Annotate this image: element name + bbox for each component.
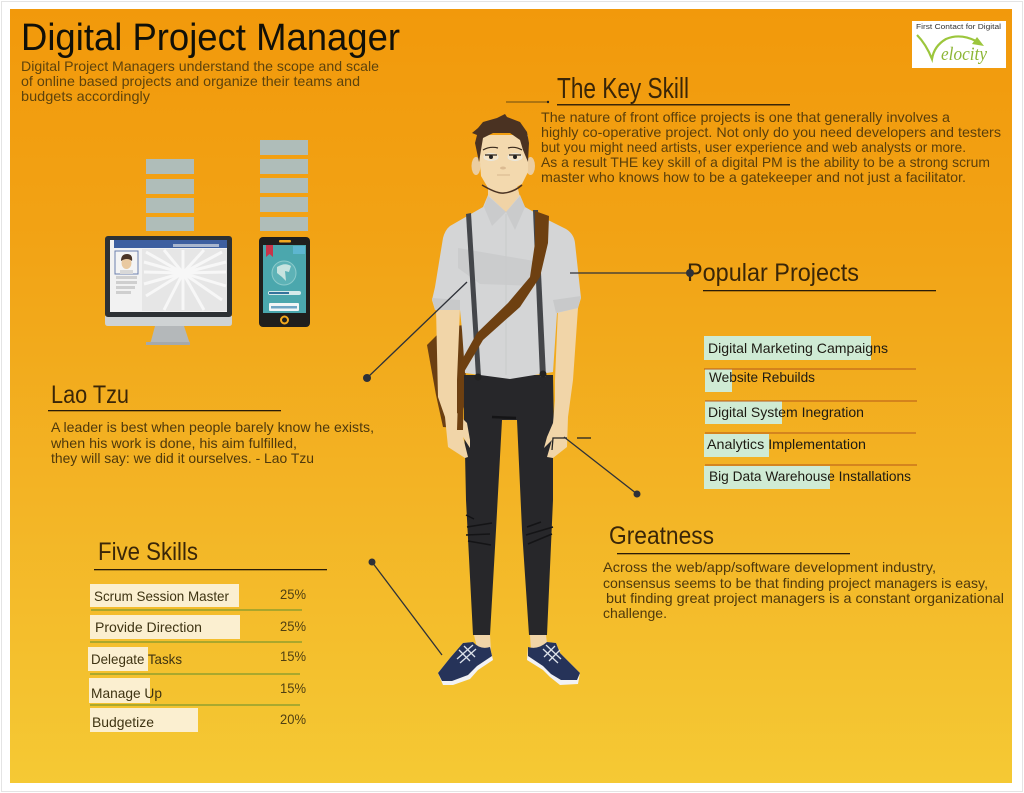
icon: desktop monitor <box>105 236 232 345</box>
figure: digital project manager character <box>427 114 581 685</box>
connector: Five Skills <box>368 558 442 655</box>
text: Greatness: challenge. <box>603 605 667 621</box>
chart: five skills list: Scrum Session Master <box>94 588 229 604</box>
heading: Greatness: Greatness <box>609 522 714 550</box>
icon: phone stacked bars <box>260 140 308 231</box>
suspenders <box>466 213 481 377</box>
text: key skill: The nature of front office projects is one that generally involves a <box>541 109 950 125</box>
arms <box>436 308 470 458</box>
list: popular projects: Analytics Implementation <box>707 436 866 452</box>
right shoe <box>527 642 580 685</box>
logo: Velocity: elocity <box>941 44 988 65</box>
ankles <box>474 635 491 652</box>
chart: five skills list: 25% <box>280 586 306 602</box>
icon: desktop stacked bars <box>146 159 194 231</box>
intro text: of online based projects and organize their teams and <box>21 73 360 89</box>
text: Lao Tzu quote: when his work is done, his aim fulfilled, <box>50 435 297 451</box>
list: popular projects: Big Data Warehouse Installations <box>709 468 911 484</box>
intro text <box>21 58 379 104</box>
chart: five skills list: Provide Direction <box>95 619 202 635</box>
text: key skill: but you might need artists, user experience and web analysts or more. <box>541 139 966 155</box>
chart: five skills list: Budgetize <box>92 714 154 730</box>
bag <box>427 325 466 428</box>
text: key skill: As a result THE key skill of a digital PM is the ability to be a strong scrum <box>541 154 990 170</box>
list: popular projects: Digital Marketing Campaigns <box>708 340 888 356</box>
connector: popular projects <box>570 269 694 277</box>
connector: key skill <box>506 101 549 103</box>
text: Lao Tzu quote: they will say: we did it ourselves. - Lao Tzu <box>51 450 314 466</box>
heading: The Key Skill: The Key Skill <box>557 73 689 105</box>
list: popular projects: Website Rebuilds <box>709 369 815 385</box>
left shoe <box>438 642 493 685</box>
list: popular projects: Digital System Inegration <box>708 404 864 420</box>
text: Lao Tzu quote <box>50 419 374 466</box>
head: face <box>478 135 528 193</box>
head: hair <box>472 114 529 162</box>
text: key skill <box>541 109 1001 185</box>
logo: Velocity <box>912 21 1006 68</box>
text: key skill: master who knows how to be a gatekeeper and not just a facilitator. <box>541 169 966 185</box>
chart: five skills list: Manage Up <box>91 685 162 701</box>
intro text: Digital Project Managers understand the scope and scale <box>21 58 379 74</box>
icon: smartphone <box>259 237 310 327</box>
shirt <box>432 195 581 379</box>
chart: five skills list: 15% <box>280 648 306 664</box>
heading: Five Skills: Five Skills <box>98 538 198 566</box>
chart: five skills list: 15% <box>280 680 306 696</box>
leather strap <box>457 211 549 430</box>
trousers <box>464 375 554 635</box>
head: ears <box>472 157 480 175</box>
chart: five skills list: Delegate Tasks <box>91 651 182 667</box>
text: Greatness: but finding great project managers is a constant organizational <box>606 590 1004 606</box>
connector: Greatness <box>552 437 640 498</box>
logo: Velocity: First Contact for Digital <box>916 22 1001 31</box>
chart: five skills list: 25% <box>280 618 306 634</box>
chart: five skills list: 20% <box>280 711 306 727</box>
heading: Popular Projects: Popular Projects <box>687 259 859 287</box>
title: Digital Project Manager <box>21 17 400 59</box>
list: popular projects <box>704 336 917 489</box>
text: key skill: highly co-operative project. Not only do you need developers and testers <box>541 124 1001 140</box>
text: Greatness: consensus seems to be that finding project managers is easy, <box>603 575 988 591</box>
text: Greatness: Across the web/app/software development industry, <box>603 559 936 575</box>
heading: Lao Tzu: Lao Tzu <box>51 381 129 409</box>
head: features <box>483 147 522 150</box>
neck <box>488 185 520 212</box>
text: Greatness <box>603 559 1004 621</box>
intro text: budgets accordingly <box>21 88 150 104</box>
text: Lao Tzu quote: A leader is best when people barely know he exists, <box>51 419 374 435</box>
chart: five skills list <box>88 584 306 732</box>
connector: Lao Tzu <box>363 282 467 382</box>
